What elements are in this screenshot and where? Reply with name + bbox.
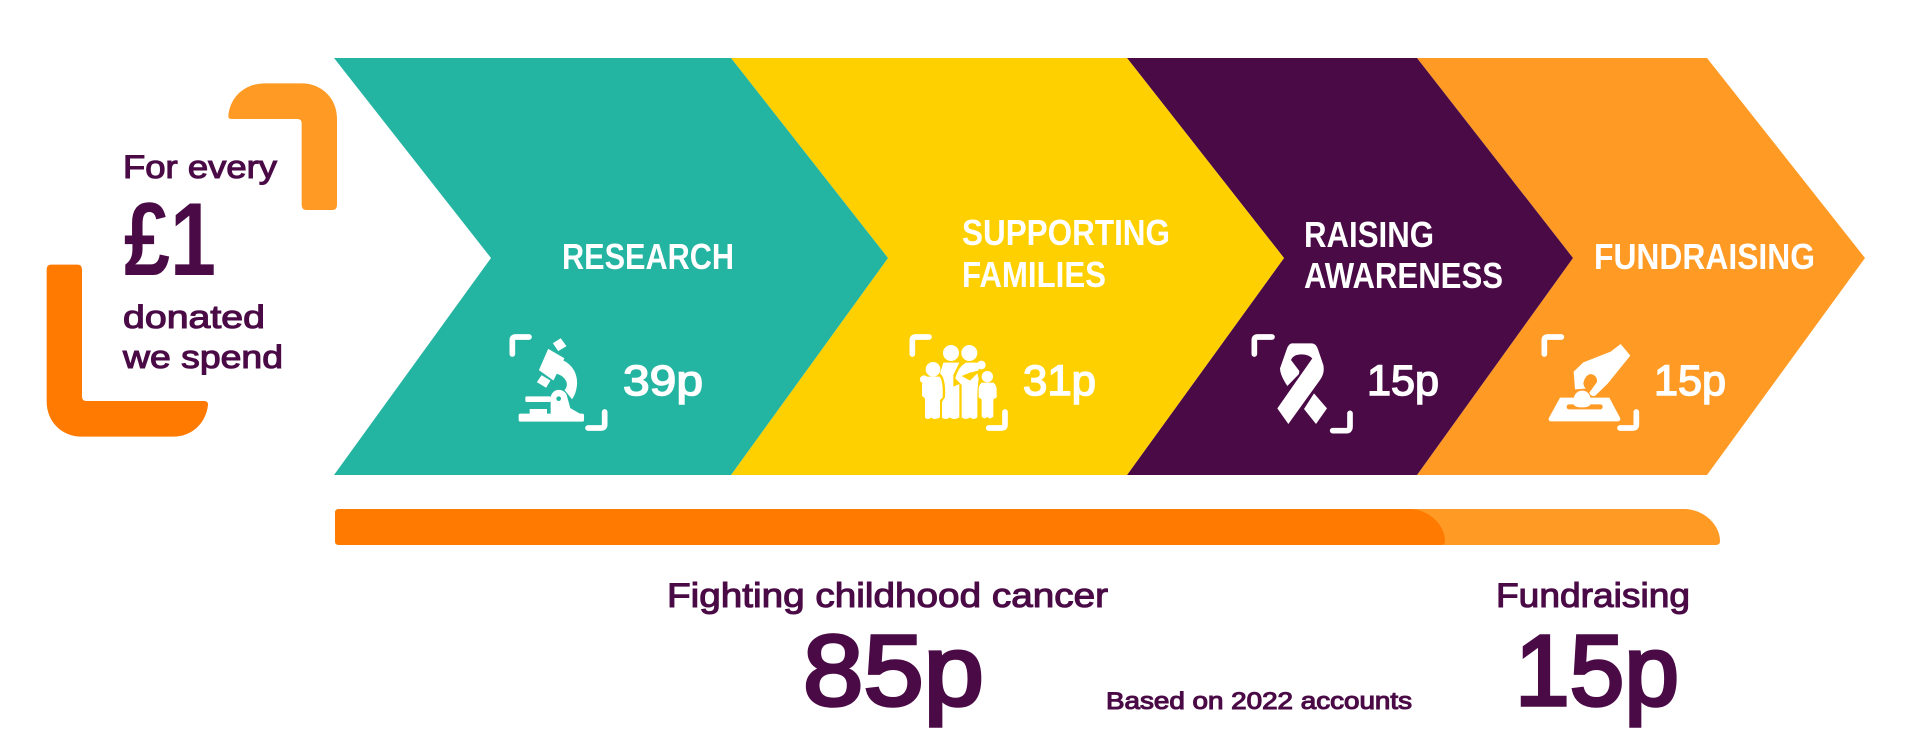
label: supporting families	[962, 212, 1170, 295]
panel: supporting families chevron	[731, 58, 1284, 475]
label: fighting childhood cancer: Fighting childhood cancer	[667, 577, 1108, 615]
bracket: bottom left	[47, 265, 208, 437]
label: research: RESEARCH	[562, 236, 734, 277]
label: raising awareness: AWARENESS	[1304, 255, 1503, 296]
bracket: top right	[228, 83, 337, 210]
value: 39p: 39p	[623, 357, 703, 405]
label: supporting families: FAMILIES	[962, 254, 1106, 295]
bar segment: fundraising 15p	[335, 509, 1720, 545]
label: fundraising: FUNDRAISING	[1594, 236, 1815, 277]
label: fundraising: Fundraising	[1496, 577, 1690, 615]
icon: hand and ballot box	[1544, 337, 1636, 428]
panel: raising awareness chevron	[1127, 58, 1573, 475]
value: 31p: 31p	[1023, 357, 1096, 405]
value: 15p: 15p	[1654, 357, 1726, 405]
value: 15p: 15p	[1367, 357, 1439, 405]
note: based on 2022 accounts: Based on 2022 accounts	[1106, 688, 1412, 715]
text: for every: For every	[123, 149, 277, 185]
label: raising awareness	[1304, 214, 1503, 296]
bar: split of spend	[335, 509, 1720, 545]
label: raising awareness: RAISING	[1304, 214, 1434, 255]
bar segment: fighting childhood cancer 85p	[335, 509, 1445, 545]
text: pound one: £1	[124, 182, 216, 298]
icon: microscope	[512, 337, 605, 428]
text: donated: donated	[123, 299, 265, 335]
panel: research chevron	[334, 58, 888, 475]
panel: fundraising chevron	[1417, 58, 1865, 475]
value: 85p: 85p	[803, 615, 984, 727]
text: we spend: we spend	[122, 339, 283, 375]
icon: awareness ribbon	[1254, 337, 1350, 431]
label: supporting families: SUPPORTING	[962, 212, 1170, 253]
icon: family	[912, 337, 1005, 428]
panel: intro for every £1	[47, 83, 337, 437]
value: 15p: 15p	[1515, 615, 1679, 727]
